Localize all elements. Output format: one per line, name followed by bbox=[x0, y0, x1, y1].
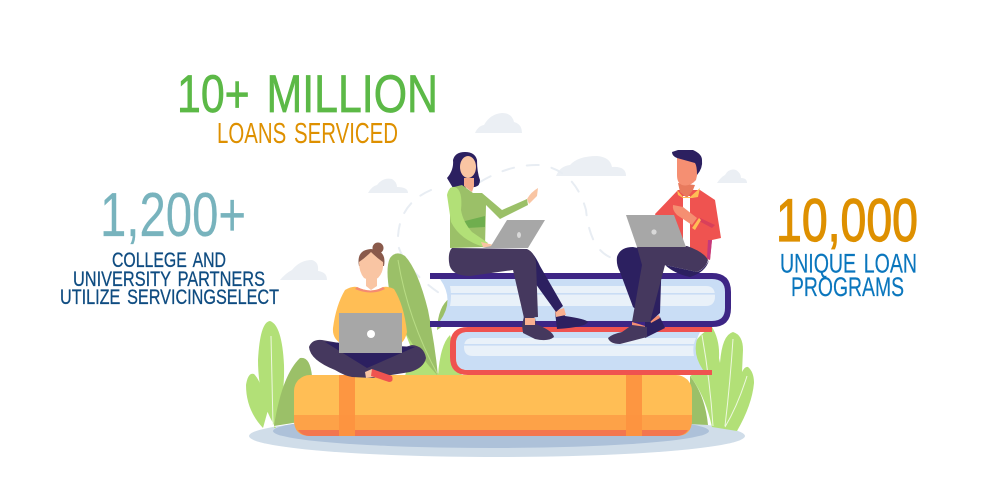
caption bbox=[60, 249, 279, 309]
plant: left cluster bbox=[246, 321, 312, 428]
figure: 10,000 bbox=[776, 187, 918, 254]
caption: UTILIZE SERVICINGSELECT bbox=[60, 286, 279, 309]
book: top purple bbox=[430, 273, 731, 327]
background clouds bbox=[280, 113, 747, 280]
caption: PROGRAMS bbox=[791, 272, 904, 302]
book: middle red bbox=[450, 327, 712, 375]
laptop bbox=[482, 220, 545, 248]
ground shadow bbox=[249, 414, 745, 457]
laptop bbox=[626, 215, 686, 247]
dashed orbit line bbox=[398, 165, 612, 295]
caption: UNIVERSITY PARTNERS bbox=[73, 268, 265, 291]
person: seated woman with laptop bbox=[309, 242, 426, 382]
person: woman on books bbox=[447, 152, 588, 340]
figure: 10+ MILLION bbox=[177, 65, 438, 124]
caption: LOANS SERVICED bbox=[217, 118, 398, 150]
book: large orange base bbox=[294, 375, 692, 436]
laptop bbox=[339, 313, 402, 353]
plant: right cluster bbox=[690, 327, 754, 431]
figure: 1,200+ bbox=[100, 181, 246, 250]
plant: large leaf behind books bbox=[388, 253, 462, 376]
caption: UNIQUE LOAN bbox=[780, 248, 917, 278]
stat: 10,000 unique loan programs bbox=[776, 187, 918, 302]
stat: 1,200+ partners bbox=[60, 181, 279, 309]
stat: 10+ million loans serviced bbox=[177, 65, 438, 150]
caption: COLLEGE AND bbox=[112, 249, 226, 272]
person: man on books bbox=[608, 150, 721, 344]
caption bbox=[780, 248, 917, 302]
